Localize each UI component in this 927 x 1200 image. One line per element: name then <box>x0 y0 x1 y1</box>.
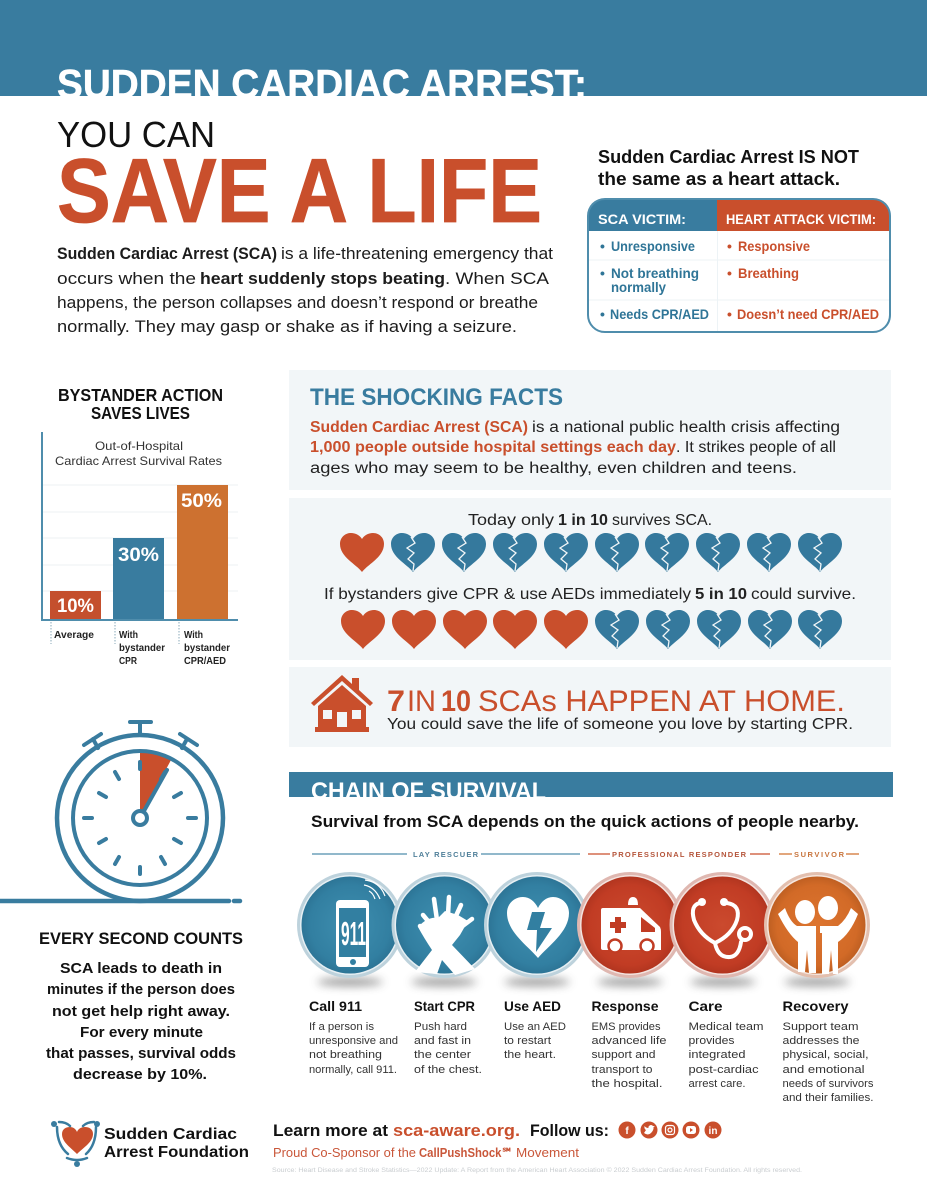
bar chart: survival rates: 30% <box>118 545 159 566</box>
panel: the shocking facts: is a national public health crisis affecting <box>532 419 840 436</box>
bar chart: survival rates: bystander <box>184 642 230 654</box>
step: use aed: Use an AED <box>504 1021 566 1033</box>
chain stage labels: LAY RESCUER <box>413 850 479 859</box>
logo: sudden cardiac arrest foundation: Sudden Cardiac <box>104 1126 237 1143</box>
panel: survival hearts: survives SCA. <box>612 512 712 529</box>
panel: comparison table: • <box>727 238 732 254</box>
intro paragraph: is a life-threatening emergency that <box>281 244 553 263</box>
panel: 7 in 10 at home: 7 <box>387 685 405 718</box>
panel: comparison table: HEART ATTACK VICTIM: <box>726 211 876 227</box>
step: recovery: physical, social, <box>782 1049 868 1061</box>
icon: call 911: 911 <box>341 915 366 952</box>
learn more line: Follow us: <box>530 1122 609 1140</box>
title: save a life: SAVE A LIFE <box>57 141 542 242</box>
intro paragraph: happens, the person collapses and doesn’t respond or breathe <box>57 293 538 312</box>
source line: Source: Heart Disease and Stroke Statistics—2022 Update: A Report from the American Heart Association © 2022 Sudden Cardiac Arrest Foundation. All rights reserved. <box>272 1166 802 1174</box>
panel: comparison table: Responsive <box>738 238 810 254</box>
intro paragraph: heart suddenly stops beating <box>200 269 445 288</box>
text block: every second counts: SCA leads to death in <box>60 960 222 977</box>
step: start cpr: and fast in <box>414 1035 471 1047</box>
learn more line <box>273 1122 609 1140</box>
step: call 911: normally, call 911. <box>309 1064 397 1076</box>
title cut strip <box>0 96 927 102</box>
icon: recovery <box>764 872 870 978</box>
social icons: in <box>709 1126 717 1137</box>
heading: not the same as a heart attack: Sudden Cardiac Arrest IS NOT <box>598 147 859 167</box>
bar chart: survival rates: 10% <box>57 596 94 617</box>
hearts row: 1 in 10 <box>340 533 842 572</box>
bar chart: survival rates: Out-of-Hospital <box>95 439 183 453</box>
bar chart: survival rates: With <box>119 629 138 641</box>
intro paragraph: . When SCA <box>445 269 550 288</box>
step: call 911: Call 911 <box>309 998 362 1014</box>
step: recovery: addresses the <box>782 1035 860 1047</box>
panel: the shocking facts <box>289 370 891 490</box>
heading: not the same as a heart attack <box>598 147 859 189</box>
panel: comparison table: Doesn’t need CPR/AED <box>737 306 879 322</box>
panel: the shocking facts: THE SHOCKING FACTS <box>310 384 563 411</box>
step: use aed: the heart. <box>504 1049 556 1061</box>
step: recovery: needs of survivors <box>782 1078 874 1090</box>
panel: survival hearts: If bystanders give CPR & use AEDs immediately <box>324 586 691 603</box>
step: recovery: and emotional <box>782 1064 864 1076</box>
panel: 7 in 10 at home: 10 <box>441 685 471 718</box>
panel: comparison table: • <box>727 306 732 322</box>
heading: not the same as a heart attack: the same as a heart attack. <box>598 169 840 189</box>
step: care: Care <box>688 998 723 1014</box>
step: response: EMS provides <box>592 1021 661 1033</box>
step: response: transport to <box>592 1064 652 1076</box>
step: response: support and <box>592 1049 656 1061</box>
panel: comparison table: • <box>727 265 732 281</box>
icon: response <box>577 872 683 978</box>
step: call 911: unresponsive and <box>309 1035 398 1047</box>
panel: 7 in 10 at home: IN <box>407 685 436 718</box>
intro paragraph: occurs when the <box>57 269 196 288</box>
step: start cpr: the center <box>414 1049 471 1061</box>
bar chart: survival rates: CPR/AED <box>184 655 226 667</box>
chain stage labels <box>312 850 859 859</box>
step: start cpr: Push hard <box>414 1021 467 1033</box>
step: start cpr: of the chest. <box>414 1064 482 1076</box>
icon: care <box>670 872 776 978</box>
panel: the shocking facts: . It strikes people of all <box>676 439 836 456</box>
step: call 911 <box>309 998 398 1076</box>
step: recovery <box>782 998 874 1104</box>
co-sponsor line: Movement <box>516 1146 580 1160</box>
bar chart: survival rates: CPR <box>119 655 137 667</box>
bar chart: survival rates: With <box>184 629 203 641</box>
bar chart: survival rates: 50% <box>181 491 222 512</box>
heading: bystander action: SAVES LIVES <box>91 403 190 423</box>
logo: sudden cardiac arrest foundation <box>51 1121 249 1167</box>
icon: house <box>311 675 373 732</box>
step: use aed: to restart <box>504 1035 551 1047</box>
step: care: provides <box>688 1035 735 1047</box>
panel: comparison table: • <box>600 306 605 322</box>
step: use aed: Use AED <box>504 998 561 1014</box>
text block: every second counts: For every minute <box>80 1024 203 1041</box>
text block: every second counts: that passes, survival odds <box>46 1045 236 1062</box>
panel: survival hearts: Today only <box>468 512 554 529</box>
panel: survival hearts: could survive. <box>751 586 856 603</box>
chain stage labels: SURVIVOR <box>794 850 845 859</box>
panel: the shocking facts: Sudden Cardiac Arrest (SCA) <box>310 419 528 436</box>
chain subheading: Survival from SCA depends on the quick actions of people nearby. <box>311 812 859 831</box>
panel: 7 in 10 at home: You could save the life of someone you love by starting CPR. <box>387 716 853 733</box>
panel: comparison table <box>588 199 890 332</box>
step: call 911: not breathing <box>309 1049 382 1061</box>
step: care: Medical team <box>688 1021 764 1033</box>
text block: every second counts: not get help right away. <box>52 1003 230 1020</box>
panel: the shocking facts: ages who may seem to be healthy, even children and teens. <box>310 460 797 477</box>
panel: comparison table: Breathing <box>738 265 799 281</box>
panel: comparison table: SCA VICTIM: <box>598 211 686 227</box>
step: recovery: Recovery <box>782 998 849 1014</box>
panel: 7 in 10 at home <box>289 667 891 747</box>
step: start cpr <box>414 998 482 1076</box>
text block: every second counts: decrease by 10%. <box>73 1066 207 1083</box>
step: response: Response <box>592 998 659 1014</box>
intro paragraph <box>57 244 553 336</box>
icon: stopwatch <box>0 722 240 901</box>
title: you can: YOU CAN <box>57 114 215 155</box>
step: recovery: Support team <box>782 1021 858 1033</box>
text block: every second counts: minutes if the person does <box>47 981 235 998</box>
step: start cpr: Start CPR <box>414 998 475 1014</box>
panel: the shocking facts: 1,000 people outside hospital settings each day <box>310 439 676 456</box>
header band <box>0 0 927 96</box>
step: call 911: If a person is <box>309 1021 375 1033</box>
panel: survival hearts <box>289 498 891 660</box>
co-sponsor line <box>273 1146 580 1160</box>
panel: 7 in 10 at home: SCAs HAPPEN AT HOME. <box>478 685 845 718</box>
step: response: advanced life <box>592 1035 666 1047</box>
logo: sudden cardiac arrest foundation: Arrest Foundation <box>104 1144 249 1161</box>
icon: start cpr <box>392 872 498 978</box>
bar chart: survival rates: Cardiac Arrest Survival Rates <box>55 454 222 468</box>
bar chart: survival rates <box>42 432 238 667</box>
bar chart: survival rates: Average <box>54 629 94 641</box>
hearts row: 5 in 10 <box>341 610 842 649</box>
social icons <box>618 1122 722 1138</box>
step: care: arrest care. <box>688 1078 746 1090</box>
panel: survival hearts: 1 in 10 <box>558 512 608 529</box>
social icons: f <box>625 1126 629 1137</box>
panel: survival hearts: 5 in 10 <box>695 586 747 603</box>
chain stage labels: PROFESSIONAL RESPONDER <box>612 850 747 859</box>
heading: every second counts: EVERY SECOND COUNTS <box>39 929 243 948</box>
step: care: integrated <box>688 1049 746 1061</box>
heading: bystander action <box>58 385 223 423</box>
panel: comparison table: normally <box>611 279 666 295</box>
icon: call 911 <box>297 872 403 978</box>
circle shadows <box>317 978 850 986</box>
panel: comparison table: Unresponsive <box>611 238 695 254</box>
learn more line: Learn more at <box>273 1122 389 1140</box>
panel: comparison table: • <box>600 238 605 254</box>
step: care <box>688 998 764 1090</box>
panel: comparison table: Needs CPR/AED <box>610 306 709 322</box>
bar chart: survival rates: bystander <box>119 642 165 654</box>
title: sudden cardiac arrest: SUDDEN CARDIAC ARREST: <box>57 61 587 107</box>
step: response: the hospital. <box>592 1078 662 1090</box>
heading band: chain of survival: CHAIN OF SURVIVAL <box>311 778 546 805</box>
intro paragraph: Sudden Cardiac Arrest (SCA) <box>57 244 277 263</box>
panel: comparison table: Not breathing <box>611 265 699 281</box>
step: use aed <box>504 998 566 1061</box>
icon: use aed <box>484 872 590 978</box>
heading: bystander action: BYSTANDER ACTION <box>58 385 223 405</box>
text block: every second counts <box>46 960 236 1083</box>
panel: comparison table: • <box>600 265 605 281</box>
step: response <box>592 998 666 1090</box>
step: care: post-cardiac <box>688 1064 759 1076</box>
intro paragraph: normally. They may gasp or shake as if having a seizure. <box>57 317 517 336</box>
learn more line: sca-aware.org. <box>393 1122 520 1140</box>
heading band: chain of survival <box>289 772 893 805</box>
step: recovery: and their families. <box>782 1092 874 1104</box>
co-sponsor line: CallPushShock℠ <box>419 1146 513 1160</box>
co-sponsor line: Proud Co-Sponsor of the <box>273 1146 416 1160</box>
